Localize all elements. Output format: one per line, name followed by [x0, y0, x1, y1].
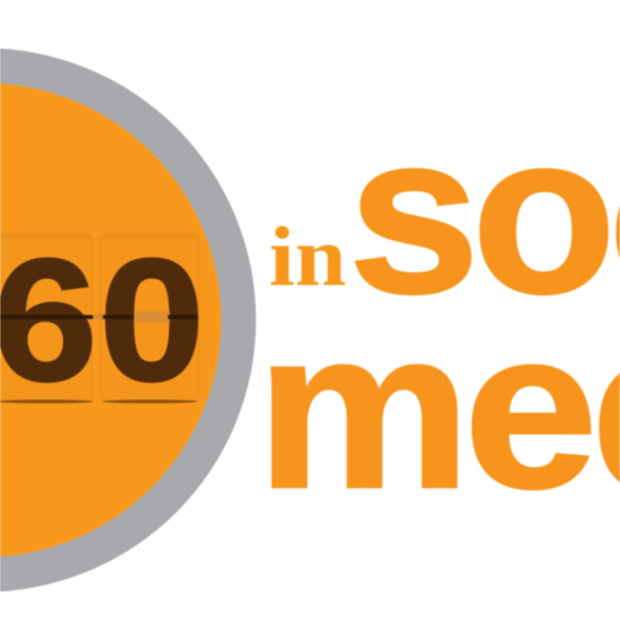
flip clock hinge line [0, 311, 198, 322]
word: in: in [269, 210, 346, 304]
badge: gray ring with orange disc [0, 48, 256, 592]
flip clock cards [0, 233, 199, 403]
